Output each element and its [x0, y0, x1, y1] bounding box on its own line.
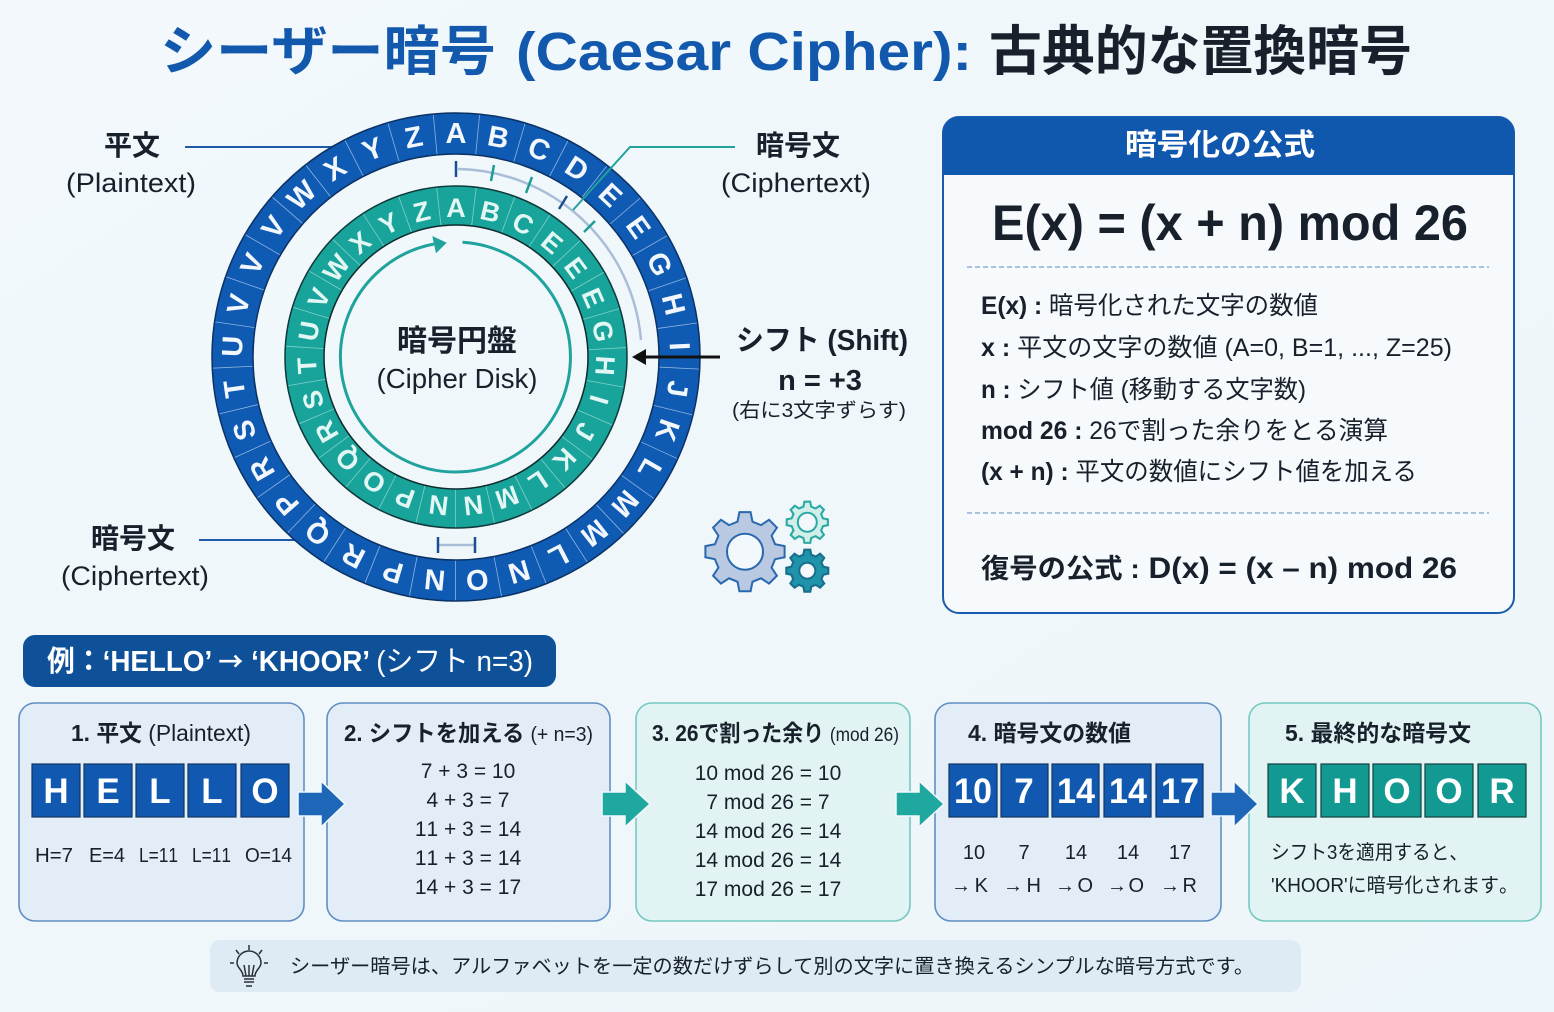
shift scale bottom: [438, 537, 475, 553]
inner ring: ciphertext alphabet: E: [535, 226, 568, 260]
outer ring: plaintext alphabet: M: [605, 483, 645, 523]
inner ring: ciphertext alphabet: E: [558, 252, 593, 284]
inner ring: ciphertext alphabet: N: [427, 489, 450, 521]
addition lines: 14 + 3 = 17: [415, 876, 521, 899]
number to letter mapping: 17: [1169, 842, 1191, 864]
modulo lines: 17 mod 26 = 17: [695, 878, 841, 901]
letter values: O=14: [245, 845, 292, 867]
title: 古典的な置換暗号: [989, 22, 1412, 82]
shift label and arrow: [632, 325, 908, 422]
inner ring: ciphertext alphabet: X: [344, 226, 377, 260]
outer ring: plaintext alphabet: W: [281, 174, 324, 217]
number to letter mapping: → O: [1055, 875, 1093, 897]
number blocks: 17: [1161, 772, 1199, 811]
outer ring: plaintext alphabet: L: [543, 537, 573, 573]
panel: step 4 cipher values: [935, 703, 1221, 921]
inner ring: ciphertext alphabet: S: [296, 387, 330, 413]
letter blocks KHOOR: H: [1332, 772, 1358, 811]
inner ring: ciphertext alphabet: P: [391, 480, 419, 514]
outer ring: plaintext alphabet: U: [217, 335, 250, 358]
cipher disk: [212, 113, 700, 601]
letter values: L=11: [139, 845, 178, 867]
inner ring: ciphertext alphabet: L: [523, 464, 553, 499]
outer ring: plaintext alphabet: E: [619, 211, 656, 245]
outer ring: plaintext alphabet: B: [485, 120, 512, 156]
shift label and arrow: n = +3: [778, 365, 862, 397]
arrow: step 1 to 2: [298, 781, 345, 827]
title: [160, 22, 1412, 82]
disk center label: 暗号円盤: [397, 325, 517, 358]
letter blocks KHOOR: O: [1383, 772, 1411, 811]
variable definitions: mod 26 : 26で割った余りをとる演算: [981, 417, 1388, 445]
label: plaintext: [66, 130, 332, 198]
inner ring: ciphertext alphabet: N: [462, 489, 485, 521]
modulo lines: [695, 762, 842, 901]
arrow: step 4 to 5: [1211, 781, 1258, 827]
inner ring: ciphertext alphabet: B: [477, 195, 503, 229]
number to letter mapping: → K: [951, 875, 989, 897]
inner ring: ciphertext alphabet: Y: [374, 206, 404, 241]
outer ring: plaintext alphabet: [212, 113, 700, 601]
outer ring: plaintext alphabet: G: [640, 247, 678, 281]
outer ring: plaintext alphabet: S: [227, 416, 264, 444]
letter values: [35, 845, 292, 867]
outer ring: plaintext alphabet: C: [523, 131, 555, 169]
title: シーザー暗号: [160, 22, 496, 82]
addition lines: 11 + 3 = 14: [415, 847, 521, 870]
modulo lines: 7 mod 26 = 7: [706, 791, 830, 814]
label: ciphertext top: 暗号文: [756, 130, 840, 161]
outer ring: plaintext alphabet: V: [221, 291, 257, 318]
inner ring: ciphertext alphabet: T: [292, 356, 323, 375]
arrow: step 3 to 4: [896, 781, 944, 827]
variable definitions: x : 平文の文字の数値 (A=0, B=1, ..., Z=25): [981, 334, 1452, 362]
title: (Caesar Cipher):: [516, 22, 972, 82]
outer ring: plaintext alphabet: V: [256, 210, 293, 245]
number to letter mapping: 7: [1018, 842, 1030, 864]
result note: シフト3を適用すると、: [1271, 841, 1468, 864]
rotation arrow circle: [340, 236, 570, 472]
panel: step 3 modulo: [636, 703, 910, 921]
variable definitions: n : シフト値 (移動する文字数): [981, 376, 1306, 404]
panel header: [943, 117, 1514, 175]
outer ring: plaintext alphabet: Z: [402, 121, 426, 155]
letter blocks KHOOR: O: [1435, 772, 1463, 811]
outer ring: plaintext alphabet: E: [592, 177, 628, 214]
outer ring: plaintext alphabet: P: [379, 553, 407, 589]
letter blocks HELLO: [32, 764, 289, 817]
outer ring: plaintext alphabet: Q: [299, 513, 337, 552]
number to letter mapping: → O: [1107, 875, 1144, 897]
main formula: E(x) = (x + n) mod 26: [992, 195, 1468, 251]
result note: 'KHOOR'に暗号化されます。: [1271, 874, 1518, 897]
label: plaintext: 平文: [104, 130, 160, 161]
number blocks: [949, 764, 1203, 817]
shift label and arrow: (右に3文字ずらす): [732, 399, 906, 422]
letter blocks HELLO: L: [201, 772, 223, 811]
variable definitions: E(x) : 暗号化された文字の数値: [981, 292, 1318, 320]
inner ring: ciphertext alphabet: H: [589, 355, 620, 376]
inner ring: ciphertext alphabet: Z: [410, 196, 433, 229]
modulo lines: 14 mod 26 = 14: [695, 820, 842, 843]
decryption formula: 復号の公式 : D(x) = (x – n) mod 26: [981, 552, 1457, 585]
variable definitions: [981, 292, 1452, 486]
number to letter mapping: 14: [1117, 842, 1139, 864]
number blocks: 7: [1014, 772, 1034, 811]
addition lines: [415, 760, 521, 899]
outer ring: plaintext alphabet: L: [631, 453, 667, 484]
letter blocks KHOOR: K: [1279, 772, 1305, 811]
panel: step 5 final ciphertext: [1249, 703, 1541, 921]
panel: step 4 cipher values: 4. 暗号文の数値: [968, 720, 1131, 746]
letter blocks HELLO: L: [149, 772, 171, 811]
inner ring: ciphertext alphabet: R: [309, 416, 345, 447]
panel header: 暗号化の公式: [1125, 129, 1315, 162]
modulo lines: 14 mod 26 = 14: [695, 849, 842, 872]
inner ring: ciphertext alphabet: C: [507, 206, 538, 242]
outer ring: plaintext alphabet: D: [559, 150, 594, 189]
number to letter mapping: 10: [963, 842, 985, 864]
example badge: [23, 635, 556, 687]
arrow: step 2 to 3: [602, 781, 650, 827]
panel: step 1 plaintext: 1. 平文 (Plaintext): [71, 720, 251, 746]
outer ring: plaintext alphabet: I: [663, 342, 695, 351]
shift scale arc with ticks: [456, 161, 641, 340]
panel: step 5 final ciphertext: 5. 最終的な暗号文: [1285, 720, 1471, 746]
outer ring: plaintext alphabet: A: [446, 118, 467, 150]
outer ring: plaintext alphabet: T: [218, 377, 252, 400]
outer ring: plaintext alphabet: Y: [358, 132, 388, 168]
outer ring: plaintext alphabet: M: [574, 512, 613, 552]
letter blocks HELLO: E: [96, 772, 120, 811]
addition lines: 11 + 3 = 14: [415, 818, 521, 841]
number blocks: 10: [954, 772, 992, 811]
outer ring: plaintext alphabet: R: [337, 536, 370, 574]
label: ciphertext top: (Ciphertext): [721, 168, 871, 198]
outer ring: plaintext alphabet: P: [269, 485, 306, 521]
result note: [1271, 841, 1518, 897]
label: plaintext: (Plaintext): [66, 168, 196, 198]
inner ring: ciphertext alphabet: E: [575, 284, 610, 312]
outer ring: plaintext alphabet: J: [660, 378, 694, 399]
letter blocks KHOOR: R: [1489, 772, 1515, 811]
modulo lines: 10 mod 26 = 10: [695, 762, 841, 785]
panel: encryption formula: [943, 117, 1514, 613]
inner ring: ciphertext alphabet: V: [302, 284, 337, 312]
outer ring: plaintext alphabet: K: [648, 415, 685, 445]
summary bar: [210, 940, 1301, 992]
outer ring: plaintext alphabet: O: [464, 562, 490, 596]
panel: step 2 add shift: [327, 703, 610, 921]
outer ring: plaintext alphabet: H: [655, 290, 691, 318]
addition lines: 4 + 3 = 7: [427, 789, 509, 812]
inner ring: ciphertext alphabet: J: [568, 417, 602, 446]
inner ring: ciphertext alphabet: U: [293, 319, 326, 343]
number blocks: 14: [1057, 772, 1096, 811]
number to letter mapping: → R: [1160, 875, 1197, 897]
summary bar: シーザー暗号は、アルファベットを一定の数だけずらして別の文字に置き換えるシンプルな暗号方式です。: [290, 955, 1254, 978]
panel: step 2 add shift: 2. シフトを加える (+ n=3): [344, 720, 593, 746]
outer ring: plaintext alphabet: X: [319, 150, 353, 188]
shift label and arrow: シフト (Shift): [736, 325, 908, 357]
letter blocks HELLO: O: [251, 772, 279, 811]
inner ring: ciphertext alphabet: O: [357, 463, 391, 500]
letter values: L=11: [192, 845, 231, 867]
inner ring: ciphertext alphabet: G: [586, 318, 619, 344]
letter values: E=4: [89, 845, 125, 867]
panel: step 3 modulo: 3. 26で割った余り (mod 26): [652, 720, 899, 746]
variable definitions: (x + n) : 平文の数値にシフト値を加える: [981, 458, 1417, 486]
addition lines: 7 + 3 = 10: [421, 760, 515, 783]
panel: step 1 plaintext: [19, 703, 304, 921]
outer ring: plaintext alphabet: R: [244, 451, 282, 486]
icon: light bulb: [230, 945, 268, 986]
disk center label: [376, 325, 538, 394]
number to letter mapping: 14: [1065, 842, 1087, 864]
icon: gears: [705, 502, 828, 592]
outer ring: plaintext alphabet: N: [423, 562, 447, 596]
number blocks: 14: [1109, 772, 1148, 811]
inner ring: ciphertext alphabet: K: [546, 442, 582, 477]
letter values: H=7: [35, 845, 73, 867]
inner ring: ciphertext alphabet: A: [446, 193, 466, 223]
label: ciphertext bottom: 暗号文: [91, 523, 175, 554]
disk center label: (Cipher Disk): [376, 363, 538, 394]
number to letter mapping: → H: [1003, 875, 1041, 897]
inner ring: ciphertext alphabet: [285, 186, 627, 528]
inner ring: ciphertext alphabet: I: [583, 392, 614, 408]
letter blocks HELLO: H: [43, 772, 69, 811]
example badge: 例：‘HELLO’ → ‘KHOOR’ (シフト n=3): [47, 642, 533, 679]
label: ciphertext top: [573, 130, 871, 210]
number to letter mapping: [951, 842, 1197, 897]
inner ring: ciphertext alphabet: W: [317, 248, 356, 287]
inner ring: ciphertext alphabet: M: [491, 479, 523, 515]
outer ring: plaintext alphabet: V: [235, 248, 272, 280]
label: ciphertext bottom: (Ciphertext): [61, 561, 209, 591]
inner ring: ciphertext alphabet: Q: [329, 441, 366, 477]
outer ring: plaintext alphabet: N: [504, 553, 533, 589]
label: ciphertext bottom: [61, 523, 300, 591]
letter blocks KHOOR: [1268, 764, 1526, 817]
